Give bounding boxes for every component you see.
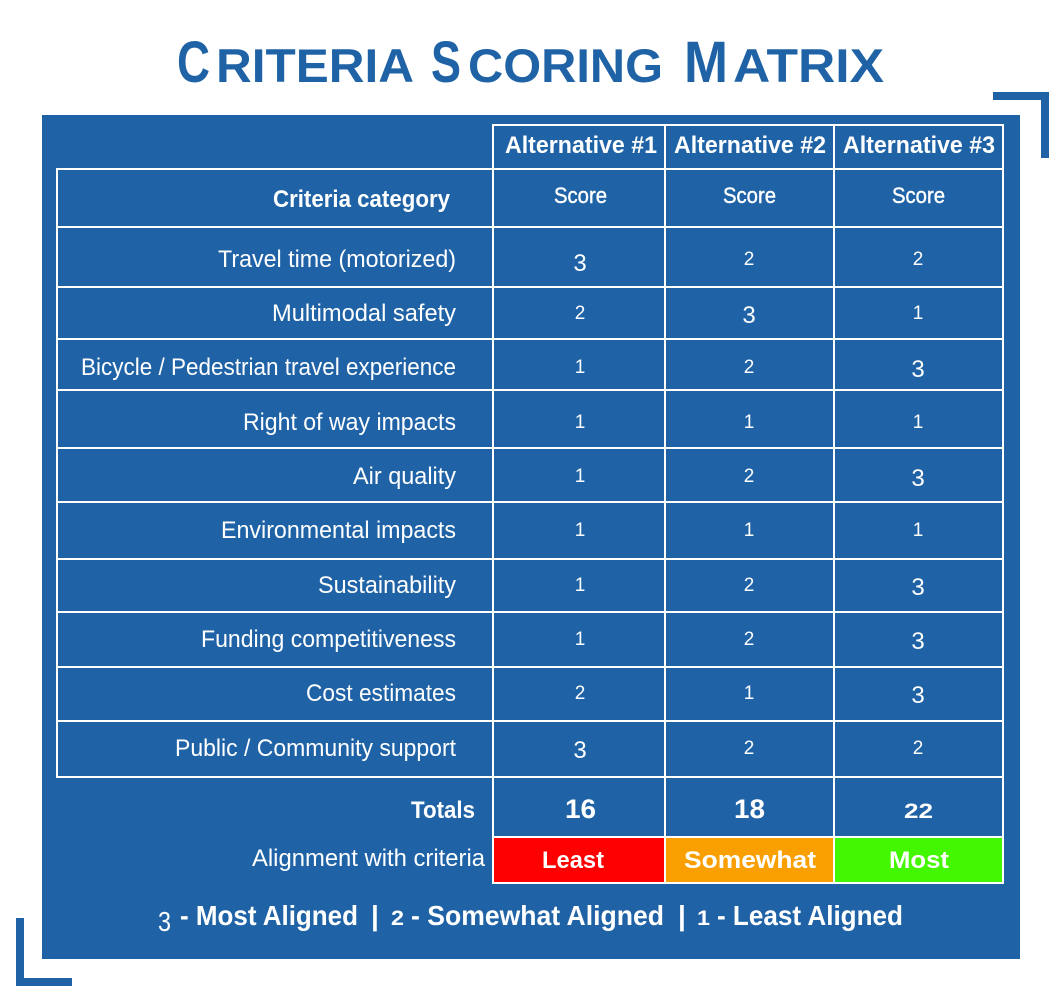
sub-header row: Criteria category <box>273 186 451 213</box>
alignment colour cells <box>493 837 1003 883</box>
scores: alternative 2: 2 <box>744 629 754 650</box>
totals row <box>411 794 933 824</box>
title <box>177 30 884 95</box>
totals row: 18 <box>734 794 765 824</box>
criteria labels: Travel time (motorized) <box>218 246 456 273</box>
scores: alternative 3: 2 <box>913 249 923 270</box>
criteria labels <box>81 246 456 762</box>
scores: alternative 2: 1 <box>744 683 754 704</box>
scale legend: | <box>371 900 379 931</box>
scores: alternative 1: 1 <box>575 357 585 378</box>
scores: alternative 3: 3 <box>911 574 925 601</box>
corner bracket: bottom left <box>16 918 72 986</box>
scores: alternative 2: 1 <box>744 520 754 541</box>
title: CORING <box>468 39 663 92</box>
criteria labels: Air quality <box>353 463 456 490</box>
scores: alternative 1: 1 <box>575 412 585 433</box>
scale legend: 3 <box>158 906 171 937</box>
scores: alternative 1: 3 <box>573 737 587 764</box>
totals row: 16 <box>565 794 596 824</box>
scores: alternative 2: 2 <box>744 738 754 759</box>
table grid <box>57 124 1003 884</box>
totals row: 22 <box>904 800 933 823</box>
corner bracket: top right <box>993 92 1049 158</box>
column headers <box>505 132 995 159</box>
title: S <box>431 30 461 95</box>
scores: alternative 1 <box>573 250 587 764</box>
sub-header row <box>273 183 945 213</box>
scores: alternative 3: 3 <box>911 465 925 492</box>
criteria labels: Cost estimates <box>306 680 456 707</box>
scores: alternative 2 <box>742 249 756 759</box>
scale legend: - Most Aligned <box>180 900 358 931</box>
sub-header row: Score <box>723 183 776 208</box>
scores: alternative 1: 1 <box>575 629 585 650</box>
panel: scoring matrix <box>42 115 1020 959</box>
title: C <box>177 30 210 95</box>
scores: alternative 3: 2 <box>913 738 923 759</box>
sub-header row: Score <box>554 183 607 208</box>
alignment row <box>252 845 949 874</box>
scores: alternative 1: 2 <box>575 303 585 324</box>
criteria labels: Funding competitiveness <box>201 626 456 653</box>
scores: alternative 3 <box>911 249 925 759</box>
criteria labels: Sustainability <box>318 572 456 599</box>
criteria labels: Bicycle / Pedestrian travel experience <box>81 354 456 381</box>
scale legend: - Somewhat Aligned <box>411 900 664 931</box>
scores: alternative 2: 2 <box>744 575 754 596</box>
criteria labels: Public / Community support <box>175 735 456 762</box>
scores: alternative 3: 3 <box>911 356 925 383</box>
scores: alternative 3: 3 <box>911 682 925 709</box>
scores: alternative 1: 1 <box>575 575 585 596</box>
scores: alternative 3: 1 <box>913 303 923 324</box>
alignment row: Most <box>889 847 949 874</box>
column headers: Alternative #3 <box>843 132 995 159</box>
scale legend: | <box>678 900 686 931</box>
column headers: Alternative #2 <box>674 132 826 159</box>
alignment row: Least <box>542 847 604 874</box>
scale legend: - Least Aligned <box>717 900 903 931</box>
scores: alternative 1: 3 <box>573 250 587 277</box>
scores: alternative 2: 1 <box>744 412 754 433</box>
panel background <box>42 115 1020 959</box>
criteria labels: Environmental impacts <box>221 517 456 544</box>
scores: alternative 1: 1 <box>575 520 585 541</box>
scores: alternative 2: 2 <box>744 357 754 378</box>
scale legend: 1 <box>697 907 710 930</box>
criteria labels: Multimodal safety <box>272 300 456 327</box>
scale legend: 2 <box>391 907 404 930</box>
column headers: Alternative #1 <box>505 132 657 159</box>
title: ATRIX <box>733 39 884 92</box>
totals row: Totals <box>411 797 475 824</box>
scores: alternative 3: 3 <box>911 628 925 655</box>
criteria labels: Right of way impacts <box>243 409 456 436</box>
title: M <box>684 30 728 95</box>
scores: alternative 2: 3 <box>742 302 756 329</box>
scores: alternative 1: 1 <box>575 466 585 487</box>
scale legend <box>158 900 903 937</box>
sub-header row: Score <box>892 183 945 208</box>
alignment row: Alignment with criteria <box>252 845 486 872</box>
scores: alternative 1: 2 <box>575 683 585 704</box>
scores: alternative 3: 1 <box>913 412 923 433</box>
scores: alternative 3: 1 <box>913 520 923 541</box>
alignment row: Somewhat <box>684 847 816 874</box>
scores: alternative 2: 2 <box>744 466 754 487</box>
title: RITERIA <box>216 39 414 92</box>
scores: alternative 2: 2 <box>744 249 754 270</box>
